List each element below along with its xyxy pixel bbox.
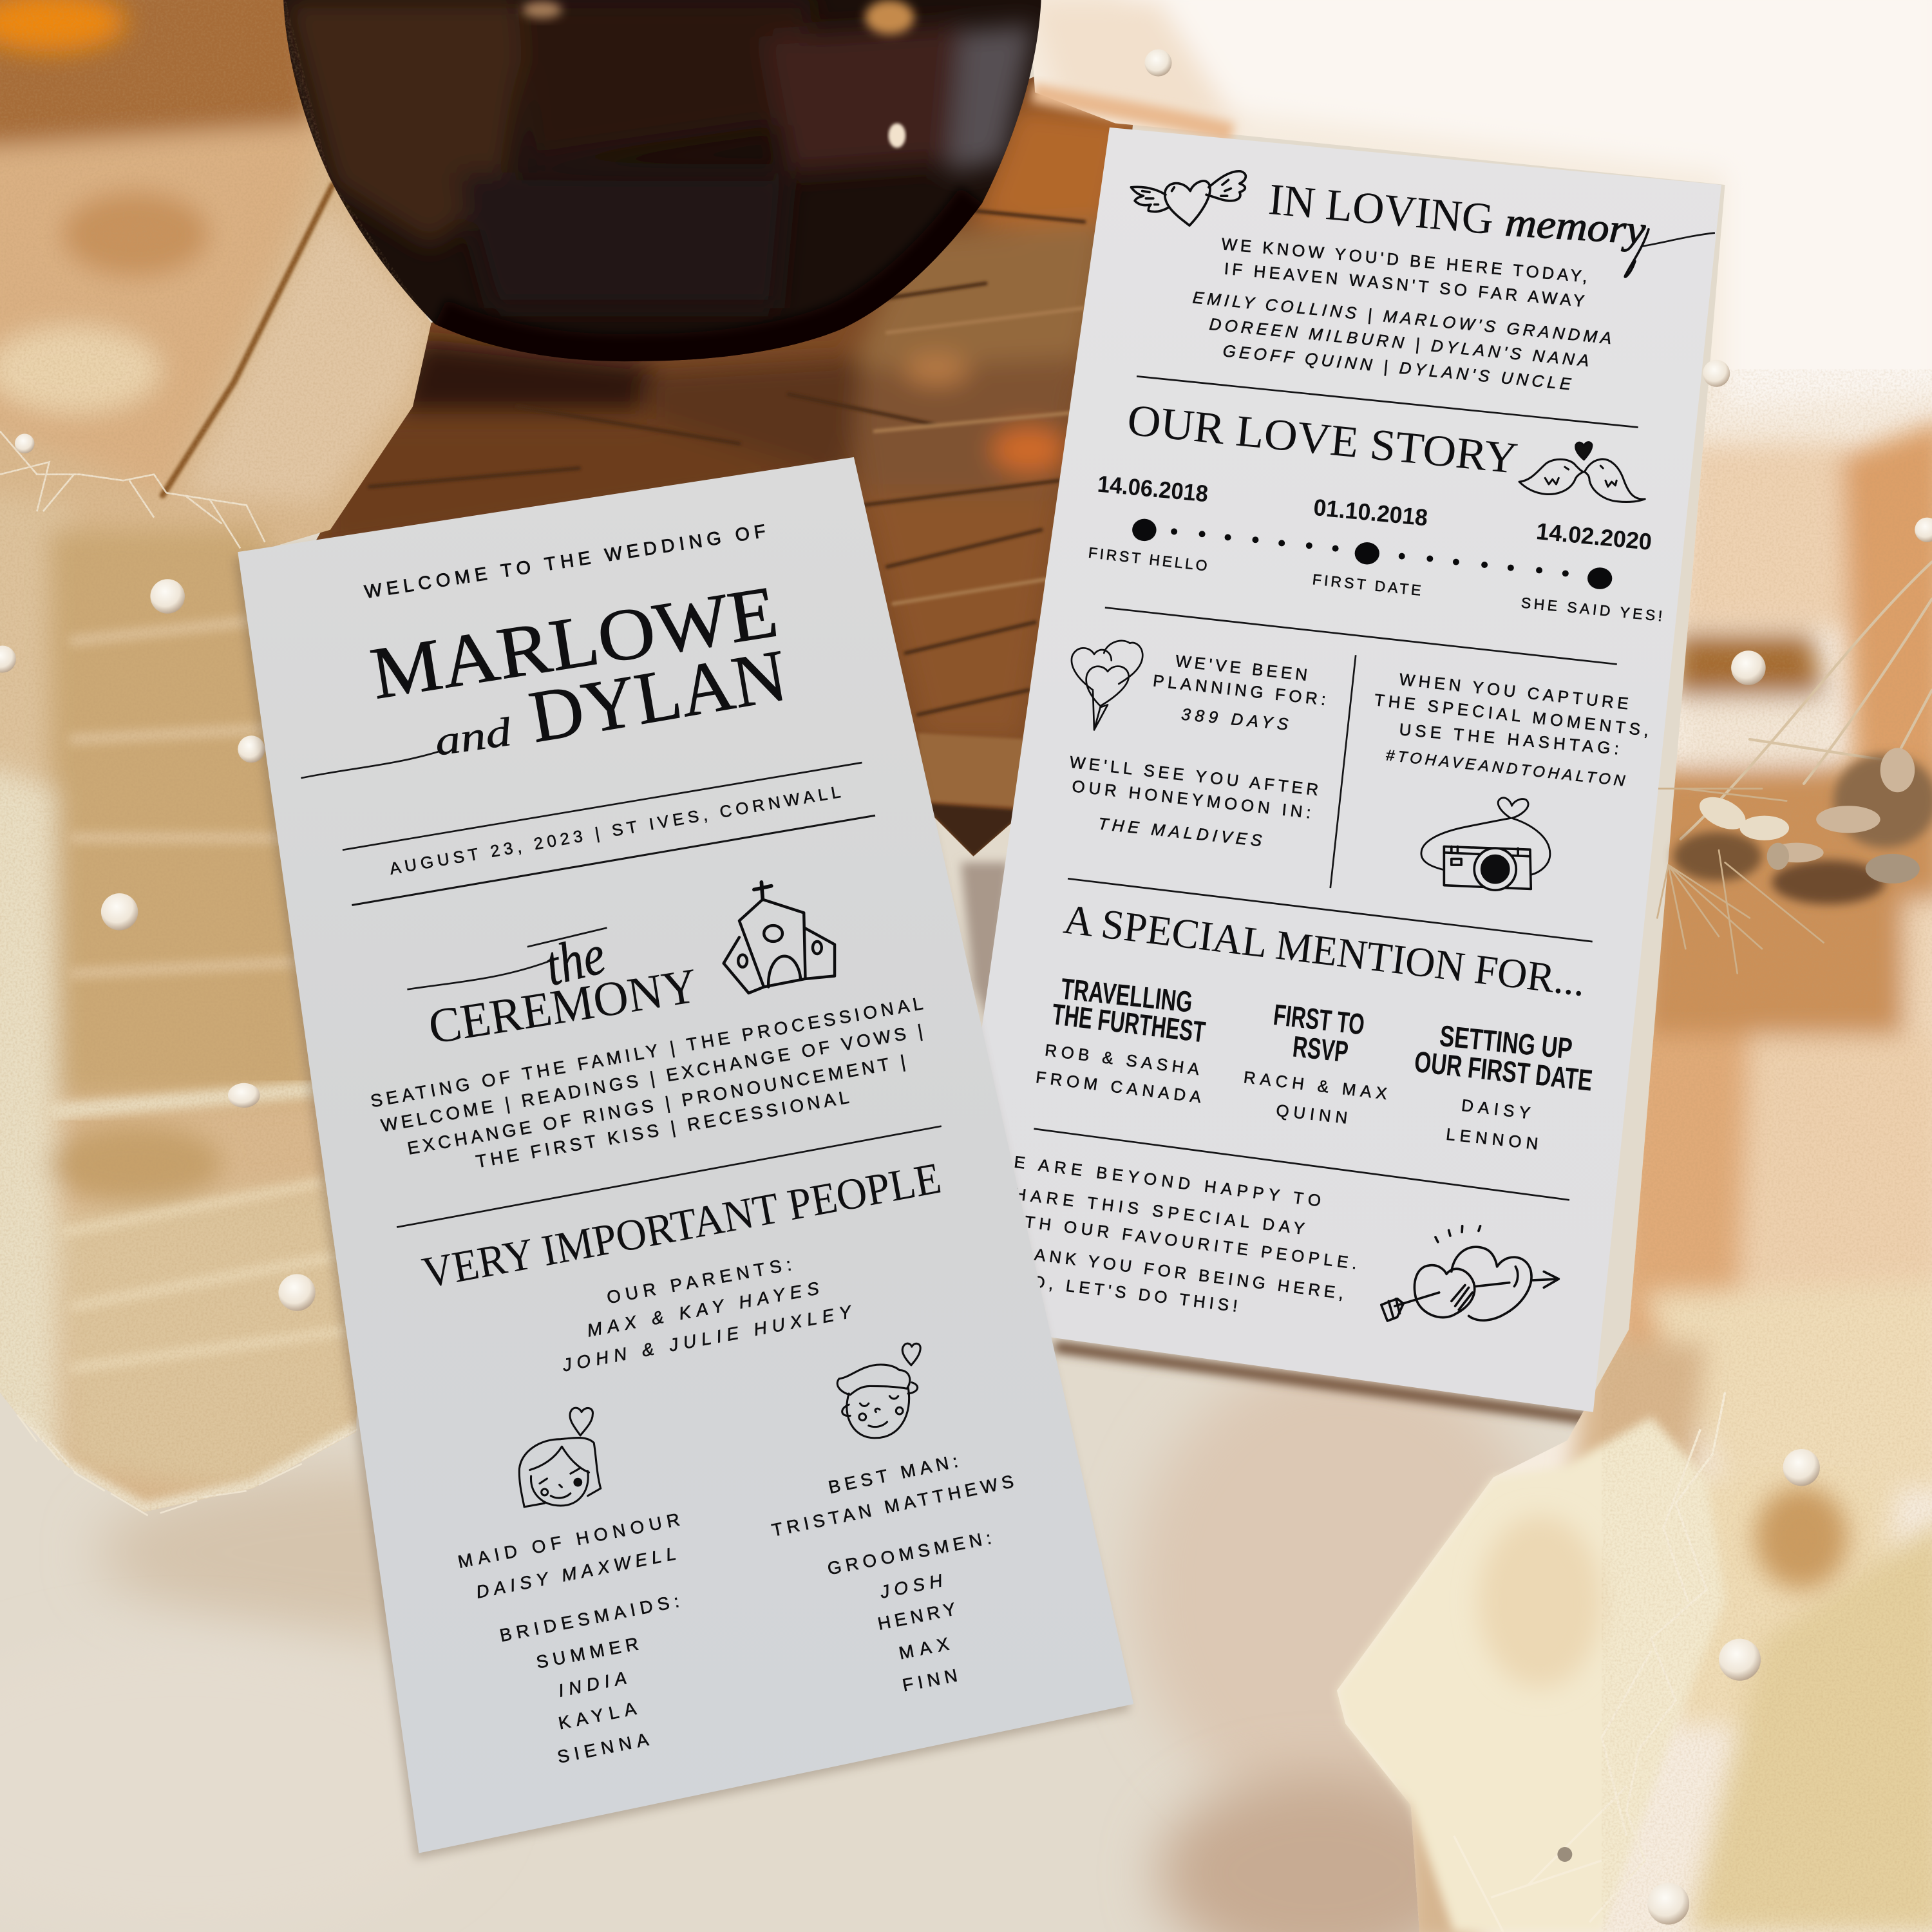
- text block: thank you note: WITH OUR FAVOURITE PEOPLE.: [995, 1209, 1358, 1273]
- text block: hashtag: WHEN YOU CAPTURE: [1398, 670, 1629, 713]
- text block: in memory: DOREEN MILBURN | DYLAN'S NANA: [1209, 316, 1590, 370]
- text block: in memory: [1192, 235, 1613, 393]
- text block: setting up our first date: LENNON: [1445, 1126, 1539, 1153]
- icon: winged heart: [1131, 171, 1245, 225]
- icon: love birds: [1519, 442, 1645, 502]
- background: fabric weave texture: [0, 0, 444, 1528]
- text block: honeymoon: THE MALDIVES: [1097, 815, 1263, 850]
- text block: setting up our first date: [1413, 1019, 1594, 1153]
- icon: groom face: [837, 1343, 920, 1438]
- text block: planning: 389 DAYS: [1180, 706, 1289, 734]
- heading: In loving memory: IN LOVING: [1267, 175, 1496, 243]
- text block: thank you note: THANK YOU FOR BEING HERE,: [1004, 1242, 1345, 1303]
- text block: parents: [560, 1254, 854, 1376]
- text block: bride's party: KAYLA: [556, 1698, 638, 1733]
- text block: hashtag: #TOHAVEANDTOHALTON: [1385, 746, 1626, 790]
- text block: planning: [1152, 652, 1327, 734]
- chart: love story timeline: [1088, 471, 1663, 624]
- cloth: cream fold: [1337, 1417, 1725, 1932]
- text block: ceremony order: THE FIRST KISS | RECESSIONAL: [475, 1087, 850, 1171]
- text block: planning: WE'VE BEEN: [1175, 652, 1308, 685]
- text block: bride's party: DAISY MAXWELL: [475, 1544, 677, 1602]
- heading: the ceremony: [407, 923, 701, 1054]
- text block: travelling the furthest: [1035, 972, 1207, 1107]
- text block: groom's party: [770, 1451, 1016, 1695]
- background: left linen cloth: [0, 0, 444, 1528]
- text block: in memory: EMILY COLLINS | MARLOW'S GRANDMA: [1192, 289, 1613, 348]
- text block: thank you note: WE ARE BEYOND HAPPY TO: [992, 1151, 1322, 1210]
- icon: church: [724, 882, 835, 993]
- text block: setting up our first date: OUR FIRST DATE: [1413, 1045, 1594, 1097]
- text block: hashtag: THE SPECIAL MOMENTS,: [1374, 691, 1650, 740]
- heading: a special mention for: A SPECIAL MENTION FOR...: [1061, 896, 1588, 1005]
- icon: camera: [1421, 798, 1550, 890]
- text block: bride's party: INDIA: [556, 1667, 628, 1701]
- text block: bride's party: SUMMER: [535, 1634, 640, 1672]
- icon: heart balloons: [1072, 641, 1142, 730]
- heading: In loving memory: memory: [1504, 200, 1647, 253]
- icon: hearts with arrow: [1381, 1226, 1558, 1321]
- text block: in memory: WE KNOW YOU'D BE HERE TODAY,: [1221, 235, 1588, 286]
- icon: bride face: [519, 1408, 601, 1507]
- heading: the ceremony: CEREMONY: [425, 958, 701, 1054]
- chart: love story timeline: SHE SAID YES!: [1520, 594, 1663, 624]
- heading: very important people: VERY IMPORTANT PEOPLE: [419, 1153, 945, 1298]
- text block: setting up our first date: DAISY: [1461, 1097, 1531, 1122]
- chart: love story timeline: FIRST HELLO: [1088, 544, 1208, 574]
- text block: in memory: GEOFF QUINN | DYLAN'S UNCLE: [1222, 342, 1572, 393]
- text block: thank you note: [992, 1151, 1358, 1316]
- text block: groom's party: FINN: [901, 1665, 959, 1695]
- heading: our love story: OUR LOVE STORY: [1125, 395, 1520, 483]
- background: dark glass vase: [277, 0, 1047, 370]
- heading: the ceremony: the: [539, 923, 611, 998]
- text block: groom's party: GROOMSMEN:: [826, 1528, 993, 1578]
- chart: love story timeline: 14.06.2018: [1096, 471, 1209, 507]
- text block: honeymoon: [1068, 753, 1320, 850]
- text: date and location: AUGUST 23, 2023 | ST IVES, CORNWALL: [388, 783, 842, 878]
- text block: ceremony order: EXCHANGE OF RINGS | PRONOUNCEMENT |: [406, 1051, 907, 1159]
- text block: first to rsvp: RACH & MAX: [1243, 1068, 1388, 1103]
- text block: honeymoon: WE'LL SEE YOU AFTER: [1068, 753, 1320, 799]
- text block: bride's party: BRIDESMAIDS:: [498, 1591, 681, 1645]
- text block: hashtag: USE THE HASHTAG:: [1398, 721, 1620, 758]
- text block: bride's party: MAID OF HONOUR: [456, 1510, 681, 1572]
- text block: travelling the furthest: TRAVELLING: [1059, 972, 1194, 1019]
- text block: ceremony order: SEATING OF THE FAMILY | THE PROCESSIONAL: [369, 993, 924, 1111]
- title: Marlowe and Dylan: and: [432, 709, 514, 764]
- dried flowers: [1651, 562, 1932, 973]
- background: cloth fringe left: [0, 431, 357, 1515]
- text block: thank you note: SO, LET'S DO THIS!: [1016, 1271, 1238, 1316]
- background: fabric weave texture right: [1602, 370, 1932, 1932]
- text block: ceremony order: WELCOME | READINGS | EXCHANGE OF VOWS |: [379, 1021, 924, 1135]
- text block: first to rsvp: QUINN: [1275, 1102, 1348, 1128]
- panel: right card: [940, 128, 1721, 1412]
- text block: planning: PLANNING FOR:: [1152, 672, 1327, 709]
- title: Marlowe and Dylan: MARLOWE: [365, 570, 783, 715]
- text block: hashtag: [1374, 670, 1650, 790]
- text block: bride's party: SIENNA: [556, 1729, 650, 1767]
- text block: in memory: IF HEAVEN WASN'T SO FAR AWAY: [1224, 260, 1585, 310]
- text block: groom's party: TRISTAN MATTHEWS: [770, 1471, 1016, 1540]
- text block: parents: JOHN & JULIE HUXLEY: [560, 1302, 854, 1376]
- chart: love story timeline: FIRST DATE: [1312, 571, 1422, 599]
- chart: love story timeline: 01.10.2018: [1312, 494, 1429, 531]
- text block: ceremony order: [369, 993, 924, 1171]
- heading: In loving memory: [1267, 175, 1715, 277]
- text: welcome line: WELCOME TO THE WEDDING OF: [363, 521, 767, 603]
- text block: groom's party: HENRY: [876, 1599, 957, 1634]
- text block: first to rsvp: FIRST TO: [1272, 998, 1366, 1041]
- text block: groom's party: BEST MAN:: [826, 1451, 960, 1497]
- title: Marlowe and Dylan: [301, 570, 793, 778]
- background: wooden board: [296, 74, 1158, 875]
- panel: left card: [234, 457, 1133, 1859]
- text block: travelling the furthest: FROM CANADA: [1035, 1068, 1202, 1107]
- text block: setting up our first date: SETTING UP: [1438, 1019, 1574, 1065]
- text block: travelling the furthest: THE FURTHEST: [1050, 997, 1207, 1049]
- background: right linen cloth: [1023, 0, 1932, 1932]
- text block: parents: MAX & KAY HAYES: [585, 1278, 820, 1341]
- text block: parents: OUR PARENTS:: [605, 1254, 793, 1307]
- title: Marlowe and Dylan: DYLAN: [524, 634, 793, 758]
- text block: first to rsvp: [1243, 998, 1388, 1128]
- text block: travelling the furthest: ROB & SASHA: [1044, 1041, 1200, 1079]
- text block: groom's party: MAX: [897, 1634, 951, 1663]
- text block: honeymoon: OUR HONEYMOON IN:: [1071, 777, 1312, 822]
- chart: love story timeline: 14.02.2020: [1535, 518, 1653, 555]
- text block: thank you note: SHARE THIS SPECIAL DAY: [998, 1183, 1305, 1238]
- text block: groom's party: JOSH: [878, 1570, 945, 1602]
- text block: bride's party: [456, 1510, 681, 1767]
- text block: first to rsvp: RSVP: [1291, 1029, 1350, 1068]
